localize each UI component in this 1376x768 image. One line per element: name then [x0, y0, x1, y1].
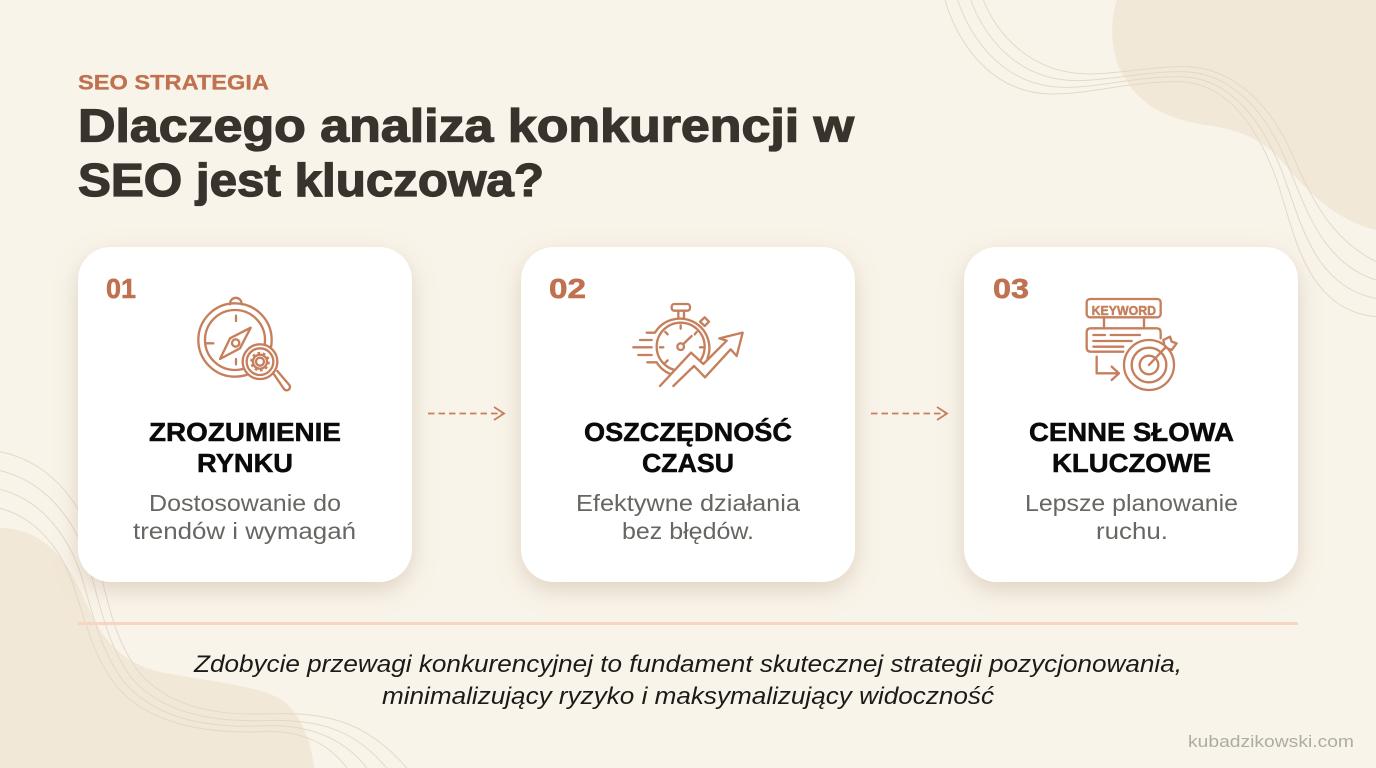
eyebrow: SEO STRATEGIA [78, 70, 269, 94]
wave lines: bottom left [0, 452, 408, 768]
title: Dlaczego analiza konkurencji w [78, 100, 854, 152]
heading: ZROZUMIENIE [149, 417, 341, 447]
icon: stopwatch with rising arrow [633, 304, 743, 386]
description [576, 490, 800, 544]
description: bez błędów. [622, 518, 754, 544]
description: Efektywne działania [576, 490, 800, 516]
panel: card 03 [964, 247, 1298, 582]
panel: card 02 [521, 247, 855, 582]
title: SEO jest kluczowa? [78, 154, 544, 206]
description: ruchu. [1096, 518, 1168, 544]
heading [584, 417, 792, 478]
arrow: 02 to 03 [871, 407, 947, 420]
heading: RYNKU [197, 448, 293, 478]
conclusion: minimalizujący ryzyko i maksymalizujący widoczność [382, 683, 994, 710]
description: Lepsze planowanie [1025, 490, 1238, 516]
heading: CENNE SŁOWA [1029, 417, 1234, 447]
blob: bottom left [0, 528, 314, 768]
heading: KLUCZOWE [1052, 448, 1211, 478]
icon: compass with magnifier [198, 298, 290, 390]
conclusion: Zdobycie przewagi konkurencyjnej to fundament skutecznej strategii pozycjonowania, [193, 651, 1182, 678]
footer: website: kubadzikowski.com [1188, 732, 1354, 751]
heading [149, 417, 341, 478]
description [1025, 490, 1238, 544]
icon: keyword sign and target [1087, 299, 1177, 390]
number 02: 02 [549, 273, 586, 304]
description [133, 490, 356, 544]
wave lines: top right [945, 0, 1376, 317]
heading [1029, 417, 1234, 478]
panel: card 01 [78, 247, 412, 582]
conclusion [193, 651, 1182, 710]
blob: top right [1112, 0, 1376, 230]
title [78, 100, 854, 206]
heading: OSZCZĘDNOŚĆ [584, 417, 792, 447]
number 03: 03 [993, 273, 1029, 304]
number 01: 01 [106, 273, 136, 304]
icon: keyword sign and target: KEYWORD [1092, 303, 1156, 318]
arrow: 01 to 02 [428, 407, 504, 420]
description: trendów i wymagań [133, 518, 356, 544]
heading: CZASU [642, 448, 734, 478]
description: Dostosowanie do [149, 490, 341, 516]
